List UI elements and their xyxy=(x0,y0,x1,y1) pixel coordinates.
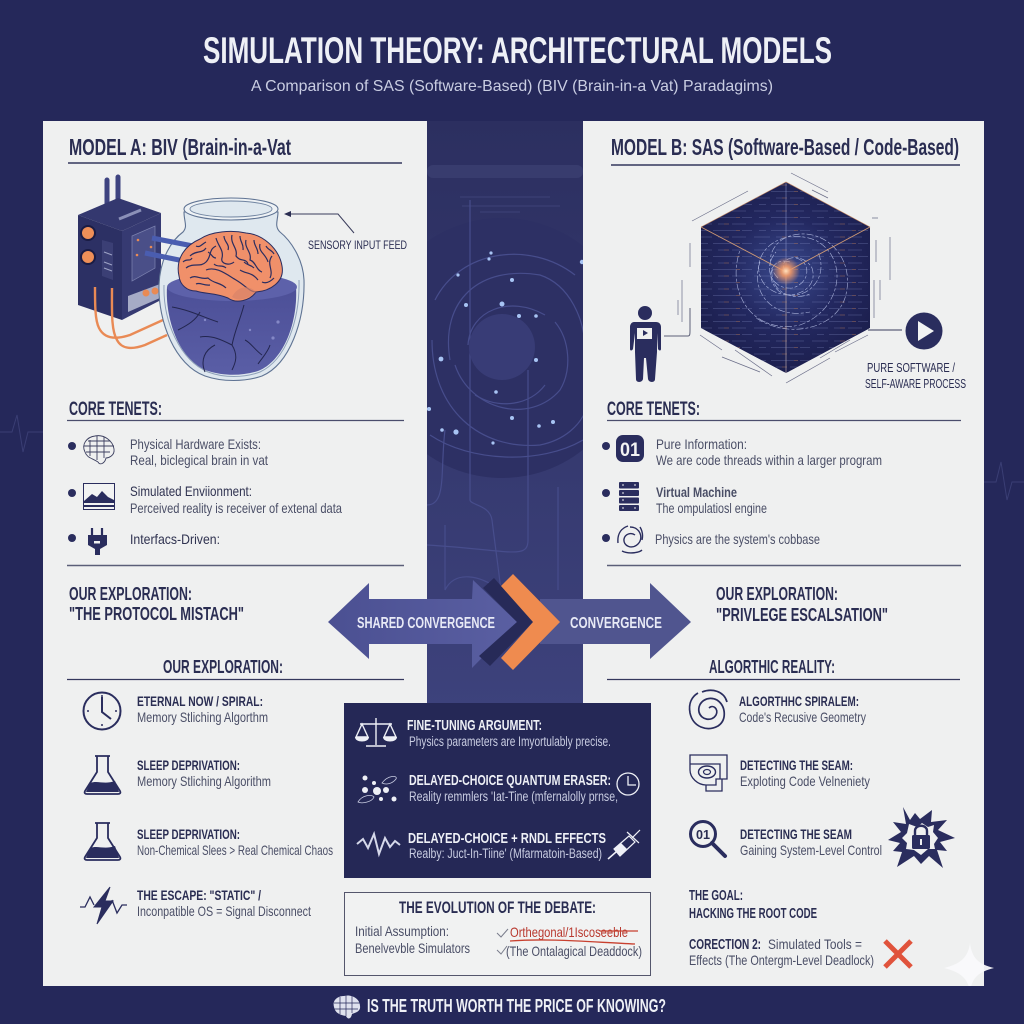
panel: evolution of the debate xyxy=(344,892,650,976)
icon: play button xyxy=(868,312,942,350)
item: virtual machine: The ompulatiosl engine xyxy=(656,500,767,516)
item: physical hardware: Physical Hardware Exists: xyxy=(130,436,261,452)
item: eternal now: Memory Stliching Algorthm xyxy=(137,709,268,725)
text: the goal: HACKING THE ROOT CODE xyxy=(689,906,817,922)
text: ontological deadlock: (The Ontalagical Deaddock) xyxy=(506,943,642,959)
section: algorithmic reality xyxy=(607,657,960,968)
icon: locked burst xyxy=(888,807,955,868)
panel: evidence xyxy=(344,703,651,878)
item: the escape: THE ESCAPE: "STATIC" / xyxy=(137,887,261,903)
item: interface driven: Interfacs-Driven: xyxy=(130,531,220,547)
callout: privilege escalation xyxy=(716,584,888,625)
subtitle: A Comparison of SAS (Software-Based) (BIV (Brain-in-a Vat) Paradagims) xyxy=(251,78,773,95)
item: sleep deprivation 2 xyxy=(85,823,333,860)
white sheet xyxy=(43,121,984,986)
text: correction 2 xyxy=(689,936,874,968)
item: delayed choice effects: DELAYED-CHOICE + RNDL EFFECTS xyxy=(408,830,606,847)
icon: cube xyxy=(678,172,890,383)
section: core tenets A xyxy=(67,399,404,566)
item: physics: Physics are the system's cobbase xyxy=(655,531,820,547)
item: fine tuning: Physics parameters are Imyortulably precise. xyxy=(409,734,611,749)
icon: glass vat xyxy=(145,198,304,380)
item: detecting seam 1 xyxy=(690,755,870,791)
label: convergence: CONVERGENCE xyxy=(570,615,662,632)
connector: person to cube xyxy=(664,308,690,336)
icon: footer brain xyxy=(334,995,360,1018)
item: the escape: Inconpatible OS = Signal Disconnect xyxy=(137,903,311,919)
item: detecting seam 1: DETECTING THE SEAM: xyxy=(740,757,853,773)
heading: algorithmic reality: ALGORTHIC REALITY: xyxy=(709,657,835,677)
text: struck assumption xyxy=(497,924,638,944)
callout: privilege escalation: "PRIVLEGE ESCALSATION" xyxy=(716,605,888,625)
item: virtual machine: Virtual Machine xyxy=(656,484,737,500)
icon: machine xyxy=(78,177,167,348)
item: simulated environment xyxy=(68,483,342,516)
item: sleep deprivation 2: SLEEP DEPRIVATION: xyxy=(137,826,240,842)
item: spiral xyxy=(690,690,866,728)
text: the goal xyxy=(689,888,817,922)
heading: our exploration: OUR EXPLORATION: xyxy=(163,657,283,677)
item: fine tuning: FINE-TUNING ARGUMENT: xyxy=(407,717,542,734)
item: eternal now xyxy=(84,692,268,730)
item: quantum eraser: Reality remmlers 'Iat-Tine (mfernalolly prnse, xyxy=(409,789,618,804)
callout: privilege escalation: OUR EXPLORATION: xyxy=(716,584,838,604)
item: detecting seam 2 xyxy=(690,822,882,858)
label: pure software xyxy=(865,360,966,391)
arrow: right xyxy=(540,583,691,659)
item: sleep deprivation 1 xyxy=(85,756,271,794)
item: delayed choice effects xyxy=(357,830,640,861)
heading: core tenets: CORE TENETS: xyxy=(69,399,162,420)
panel: Model A xyxy=(67,134,407,924)
item: spiral: ALGORTHHC SPIRALEM: xyxy=(739,693,859,709)
arrow: sensory feed xyxy=(284,211,354,233)
item: sleep deprivation 1: SLEEP DEPRIVATION: xyxy=(137,757,240,773)
heading: evolution: THE EVOLUTION OF THE DEBATE: xyxy=(399,899,596,917)
text: correction 2: Simulated Tools = xyxy=(768,936,862,952)
item: pure information: We are code threads within a larger program xyxy=(656,452,882,468)
callout: protocol mismatch: "THE PROTOCOL MISTACH" xyxy=(69,604,244,624)
item: eternal now: ETERNAL NOW / SPIRAL: xyxy=(137,693,263,709)
panel: Model B xyxy=(602,134,966,968)
item: spiral: Code's Recusive Geometry xyxy=(739,709,866,725)
icon: sparkle xyxy=(944,943,994,992)
illustration: brain in a vat xyxy=(78,177,407,380)
item: the escape xyxy=(80,887,311,924)
item: detecting seam 2: DETECTING THE SEAM xyxy=(740,826,852,842)
text: struck assumption: Orthegonal/1Iscoseeble xyxy=(510,924,628,940)
tagline: IS THE TRUTH WORTH THE PRICE OF KNOWING? xyxy=(367,996,666,1016)
item: simulated environment: Perceived reality is receiver of extenal data xyxy=(130,500,342,516)
item: sleep deprivation 2: Non-Chemical Slees > Real Chemical Chaos xyxy=(137,842,333,858)
item: fine tuning xyxy=(355,717,611,749)
label: shared convergence: SHARED CONVERGENCE xyxy=(357,615,495,632)
label: sensory input feed: SENSORY INPUT FEED xyxy=(308,238,407,252)
item: detecting seam 2: Gaining System-Level Control xyxy=(740,842,882,858)
text: initial assumption: Initial Assumption: xyxy=(355,923,449,939)
item: quantum eraser: DELAYED-CHOICE QUANTUM ERASER: xyxy=(409,772,611,789)
item: delayed choice effects: Realby: Juct-In-Tiine' (Mfarmatoin-Based) xyxy=(409,846,602,861)
heading: core tenets: CORE TENETS: xyxy=(607,399,700,420)
item: quantum eraser xyxy=(358,772,639,804)
icon: brain xyxy=(178,231,282,301)
item: physical hardware: Real, biclegical brain in vat xyxy=(130,452,268,468)
item: simulated environment: Simulated Enviionment: xyxy=(130,483,252,499)
item: virtual machine xyxy=(602,482,767,516)
callout: protocol mismatch xyxy=(69,584,244,624)
icon: red cross xyxy=(885,941,911,967)
text: initial assumption xyxy=(355,923,470,956)
item: physics xyxy=(602,526,820,553)
item: pure information: 01 xyxy=(620,440,640,461)
arrow: left xyxy=(328,580,517,668)
item: detecting seam 2: 01 xyxy=(696,827,710,842)
chevron: orange xyxy=(501,574,560,670)
callout: protocol mismatch: OUR EXPLORATION: xyxy=(69,584,192,604)
item: interface driven xyxy=(68,528,220,555)
arrows: shared convergence xyxy=(328,574,691,670)
item: detecting seam 1: Exploting Code Velneniety xyxy=(740,773,870,789)
text: correction 2: CORECTION 2: xyxy=(689,937,761,953)
section: core tenets B xyxy=(602,399,961,566)
item: physical hardware xyxy=(68,436,268,468)
label: pure software: PURE SOFTWARE / xyxy=(867,360,955,375)
item: pure information xyxy=(602,435,882,468)
text: correction 2: Effects (The Ontergm-Level Deadlock) xyxy=(689,952,874,968)
item: sleep deprivation 1: Memory Stliching Algorithm xyxy=(137,773,271,789)
footer xyxy=(0,986,1024,1024)
text: initial assumption: Benelvevble Simulators xyxy=(355,940,470,956)
central spiral backdrop xyxy=(427,165,583,590)
item: pure information: Pure Information: xyxy=(656,436,747,452)
illustration: code cube xyxy=(630,172,966,391)
heading: Model A: MODEL A: BIV (Brain-in-a-Vat xyxy=(69,134,291,160)
label: pure software: SELF-AWARE PROCESS xyxy=(865,376,966,391)
icon: person xyxy=(630,306,661,382)
section: our exploration list xyxy=(67,657,404,924)
chevron: dark xyxy=(479,578,533,666)
text: the goal: THE GOAL: xyxy=(689,888,743,904)
